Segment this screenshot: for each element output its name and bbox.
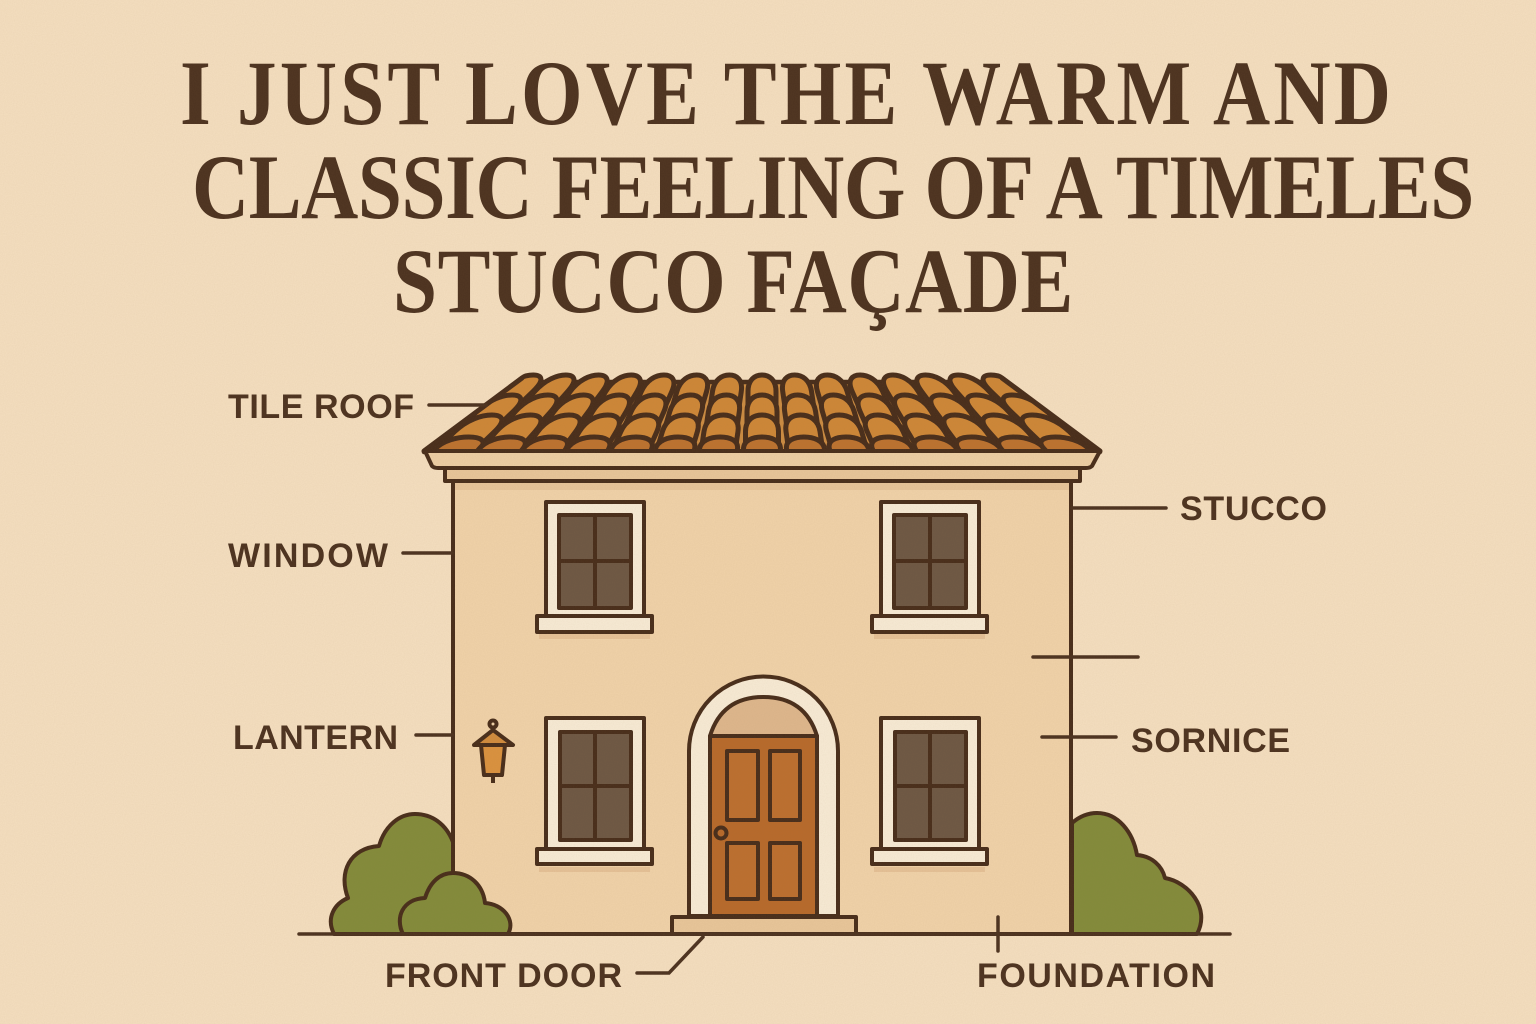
icon: lantern [474, 720, 513, 783]
right bush [1072, 813, 1201, 934]
window: upper left [537, 502, 652, 632]
roof underlay [424, 382, 1100, 452]
house [299, 375, 1230, 934]
label: stucco: STUCCO [1180, 490, 1327, 528]
window: lower right [872, 718, 987, 864]
cornice shadow [455, 482, 1069, 490]
door arch [689, 676, 838, 916]
label: front door [385, 937, 703, 995]
tile rows [432, 372, 1092, 449]
title: STUCCO FAÇADE [393, 231, 1073, 332]
title [180, 43, 1474, 332]
window sill shadows [539, 634, 985, 872]
window: upper right [872, 502, 987, 632]
label: tile roof: TILE ROOF [228, 388, 414, 426]
label: front door: FRONT DOOR [385, 957, 622, 995]
left bush, large [331, 814, 453, 934]
door step [672, 917, 856, 934]
title: CLASSIC FEELING OF A TIMELES [192, 137, 1474, 238]
front door [672, 676, 856, 934]
door leaf [710, 736, 817, 916]
arch fanlight [710, 697, 817, 736]
roof side edges [424, 378, 1100, 451]
left bush, small [400, 873, 510, 934]
unlabelled leader line [1033, 655, 1138, 659]
window: lower left [537, 718, 652, 864]
roof tiles [424, 375, 1100, 459]
lower cornice band [445, 466, 1080, 481]
label: foundation: FOUNDATION [977, 957, 1215, 995]
label: window: WINDOW [228, 537, 389, 575]
upper cornice [425, 451, 1100, 468]
label: sornice: SORNICE [1131, 722, 1290, 760]
label: lantern: LANTERN [233, 719, 398, 757]
ground line [299, 932, 1230, 936]
door panels [727, 751, 800, 899]
stucco wall [453, 478, 1071, 934]
door knob [716, 828, 726, 838]
title: I JUST LOVE THE WARM AND [180, 43, 1391, 144]
